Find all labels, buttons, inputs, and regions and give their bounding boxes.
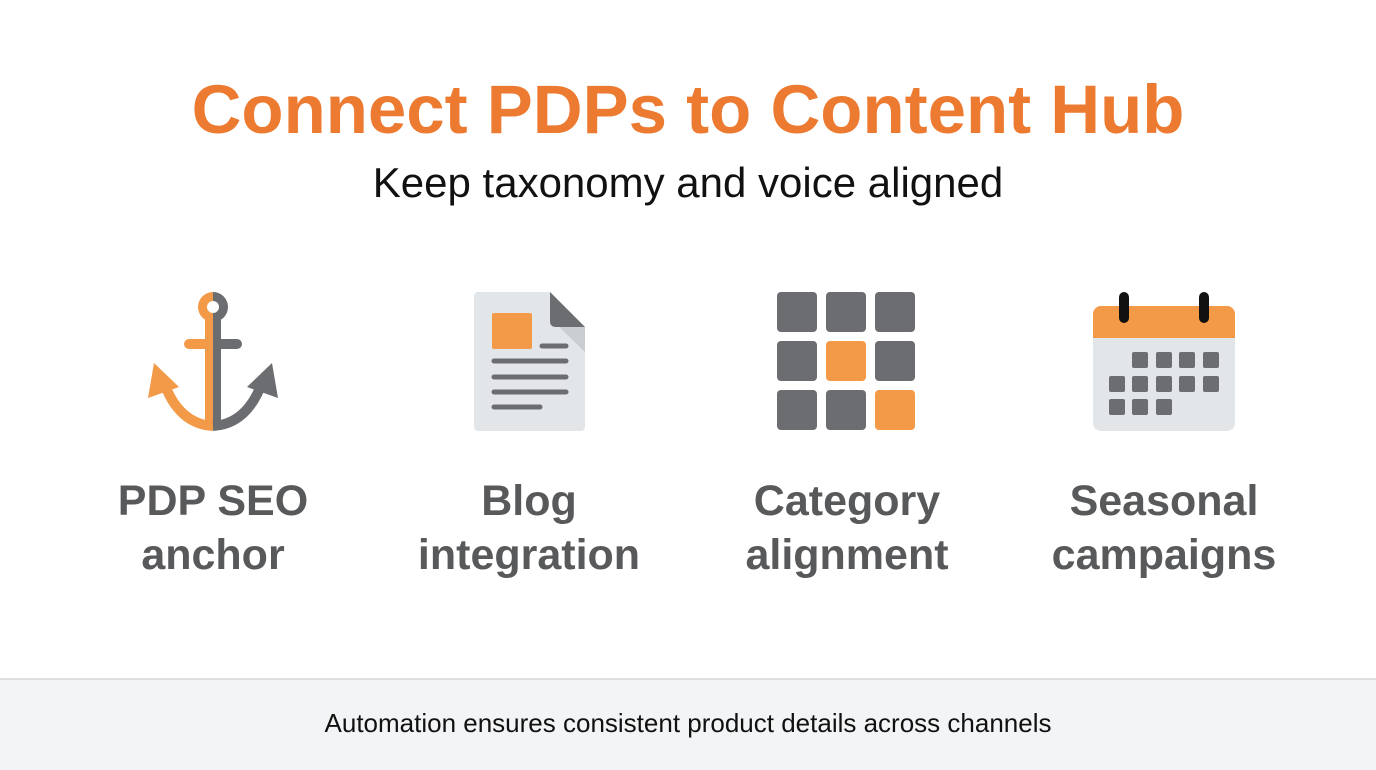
label: Category alignment <box>745 477 949 579</box>
label: Blog integration <box>418 477 640 579</box>
label: Category alignment: alignment <box>745 531 949 579</box>
icon: document <box>474 292 585 431</box>
icon: grid <box>777 292 915 430</box>
label: Blog integration: integration <box>418 531 640 579</box>
label: Category alignment: Category <box>754 477 940 525</box>
icon: anchor <box>148 292 278 430</box>
footer: Automation ensures consistent product details across channels <box>325 708 1051 738</box>
label: PDP SEO anchor: PDP SEO <box>118 477 308 525</box>
label: PDP SEO anchor <box>118 477 308 579</box>
label: Seasonal campaigns: campaigns <box>1052 531 1276 579</box>
label: Seasonal campaigns: Seasonal <box>1070 477 1258 525</box>
subtitle: Keep taxonomy and voice aligned <box>373 159 1003 206</box>
footer <box>0 678 1376 770</box>
icon: calendar <box>1093 292 1235 431</box>
label: Blog integration: Blog <box>481 477 577 525</box>
title: Connect PDPs to Content Hub <box>192 71 1184 148</box>
label: PDP SEO anchor: anchor <box>141 531 285 579</box>
label: Seasonal campaigns <box>1052 477 1276 579</box>
